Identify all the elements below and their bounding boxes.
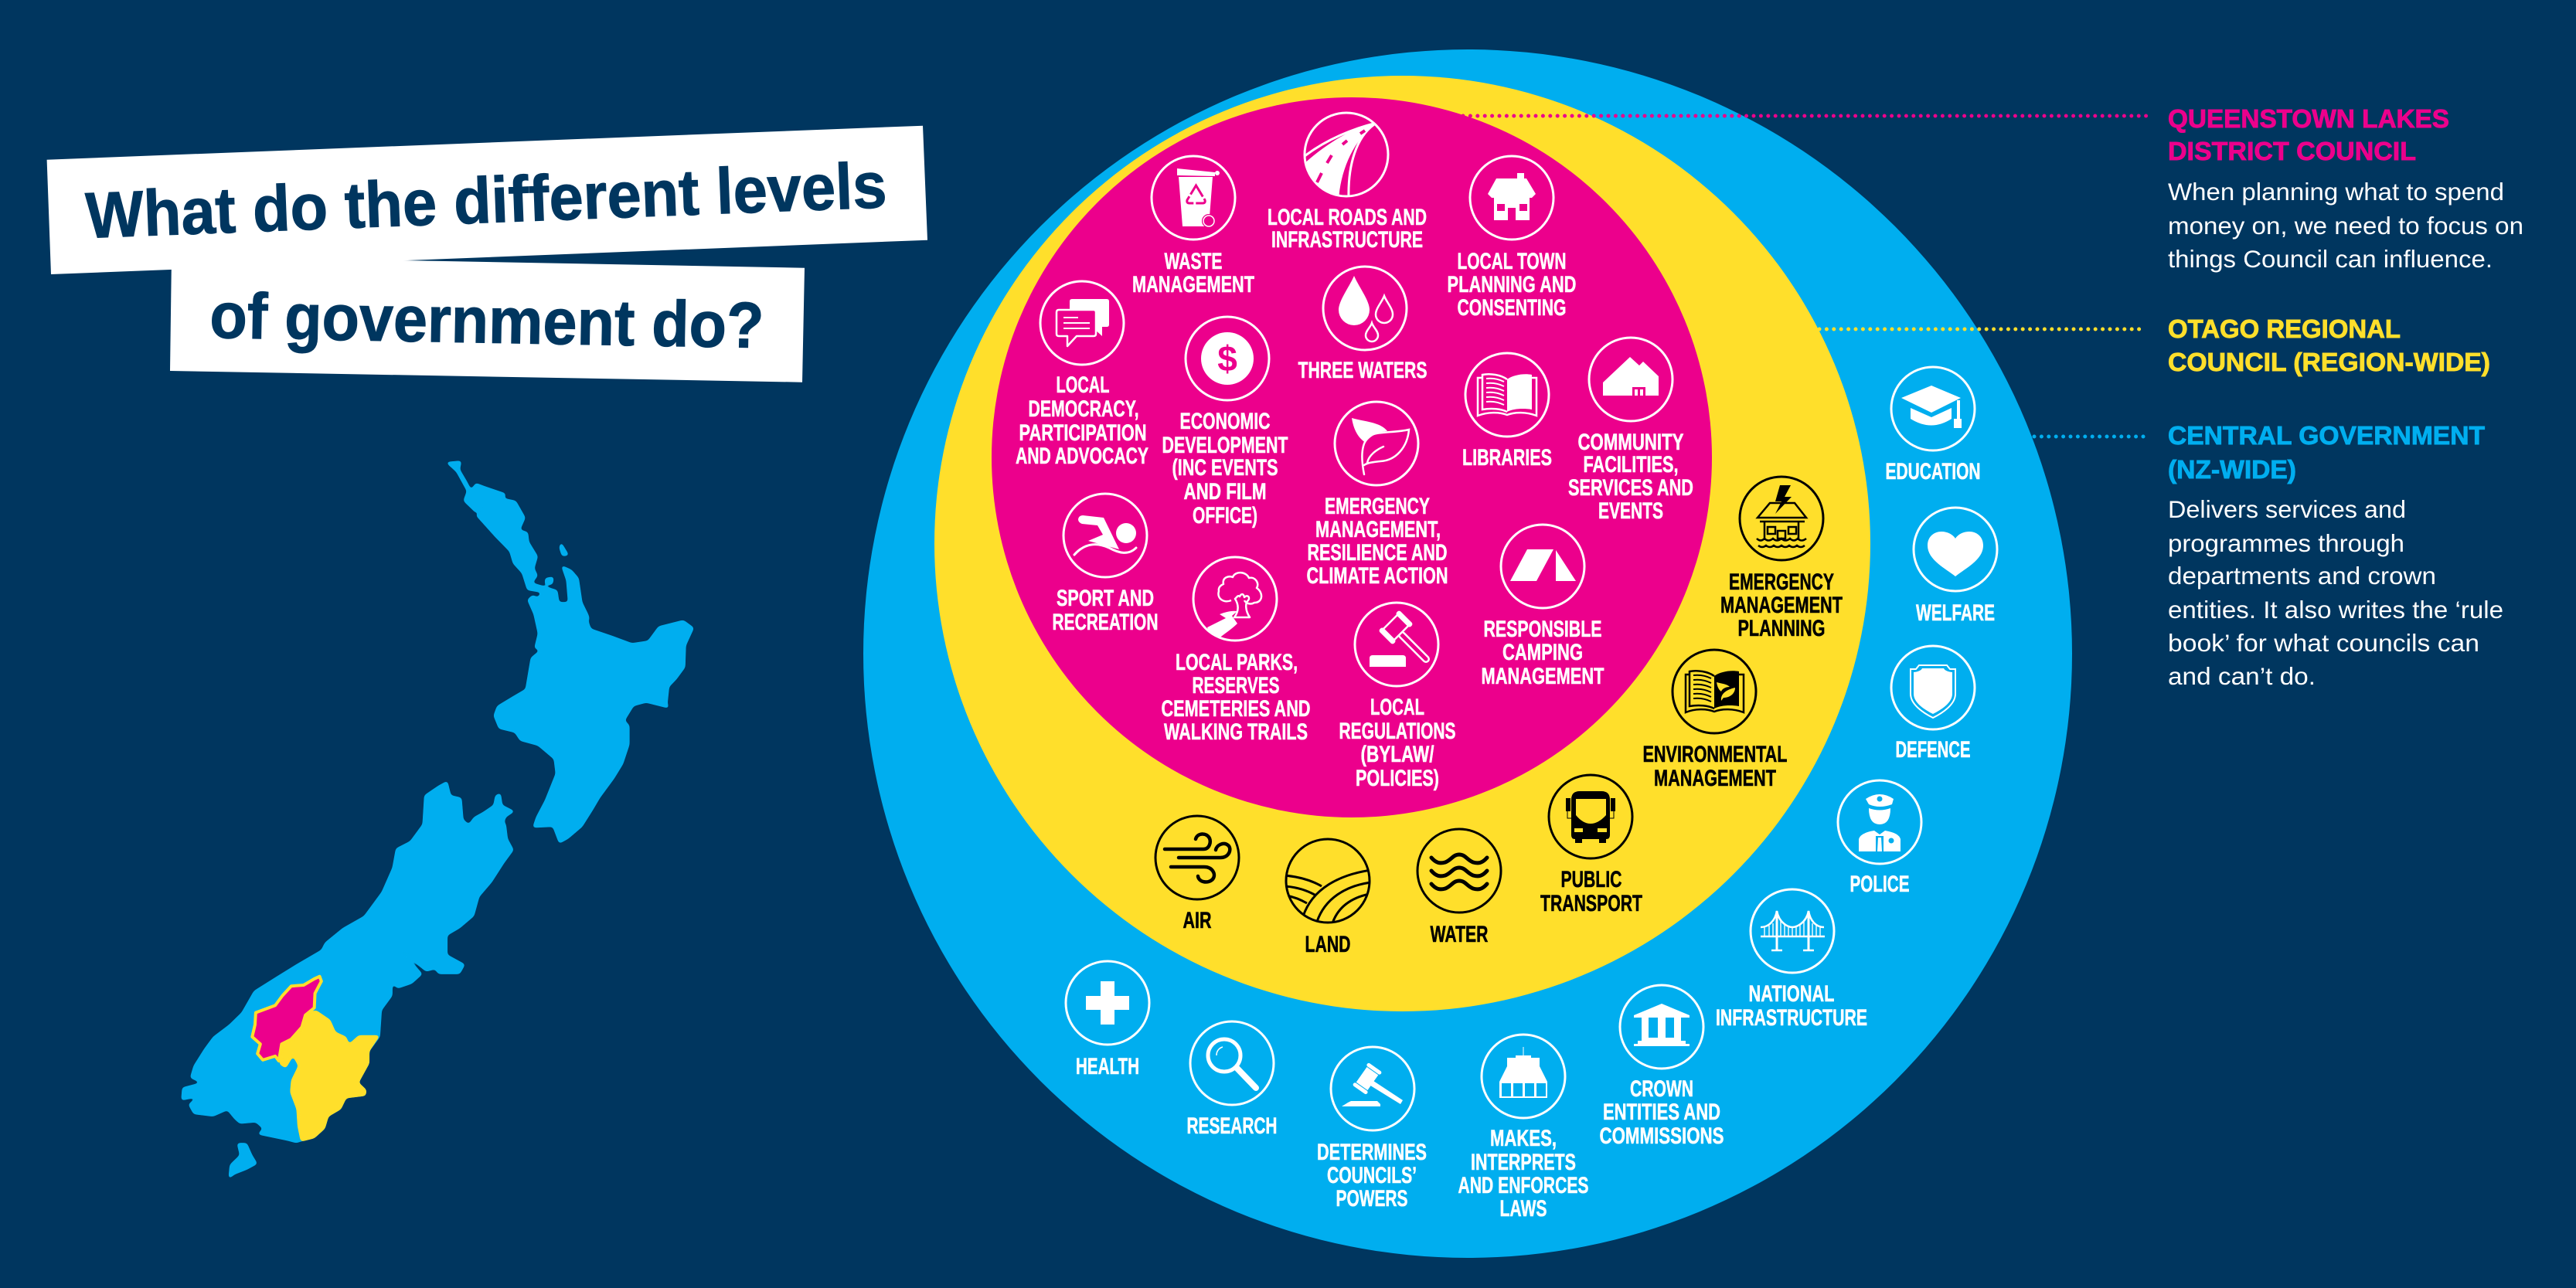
label: AND ADVOCACY — [1016, 443, 1148, 469]
body text — [2168, 495, 2503, 690]
service: air — [1155, 816, 1239, 933]
body text: entities. It also writes the ‘rule — [2168, 596, 2503, 624]
icon: magnifying glass — [1190, 1021, 1274, 1105]
leader line: central government — [2034, 434, 2146, 439]
heading — [2168, 421, 2485, 484]
label: POWERS — [1336, 1186, 1408, 1212]
Queenstown Lakes district — [252, 977, 322, 1061]
label: DEMOCRACY, — [1028, 396, 1139, 422]
service: crown entities and commissions — [1600, 985, 1724, 1149]
title: banner — [47, 126, 927, 382]
icon: graduation cap — [1891, 367, 1975, 450]
label: POLICIES) — [1356, 766, 1439, 791]
body text: money on, we need to focus on — [2168, 212, 2523, 240]
heading: (NZ-WIDE) — [2168, 455, 2296, 484]
service: economic development — [1162, 317, 1288, 528]
label: RESPONSIBLE — [1484, 617, 1601, 642]
label — [1268, 205, 1427, 253]
label — [1016, 372, 1148, 469]
leader line: regional council — [1819, 328, 2146, 331]
icon: wind — [1155, 816, 1239, 899]
service: community facilities — [1568, 338, 1693, 524]
body text: Delivers services and — [2168, 495, 2406, 523]
label: LOCAL ROADS AND — [1268, 205, 1427, 230]
label: DEVELOPMENT — [1162, 433, 1288, 458]
title line 1 strip — [47, 126, 927, 274]
label: SERVICES AND — [1568, 475, 1693, 501]
label: DETERMINES — [1317, 1140, 1427, 1165]
service: police — [1838, 780, 1921, 897]
label — [1447, 249, 1577, 321]
Stewart Island — [229, 1143, 257, 1179]
Otago region — [280, 1011, 380, 1142]
service: education — [1886, 367, 1980, 484]
label: CAMPING — [1502, 640, 1583, 665]
service: local town planning and consenting — [1447, 156, 1577, 321]
icon: water drops — [1323, 267, 1407, 350]
service: local regulations — [1339, 603, 1456, 791]
text block: Queenstown Lakes District Council — [2168, 104, 2523, 273]
service: emergency management planning — [1720, 477, 1843, 641]
icon: swimmer — [1063, 494, 1147, 577]
label: INTERPRETS — [1471, 1150, 1576, 1175]
icon: flooded house with lightning — [1740, 477, 1823, 560]
label: WELFARE — [1916, 600, 1995, 626]
label: (BYLAW/ — [1360, 742, 1434, 767]
label — [1161, 650, 1311, 745]
label: (INC EVENTS — [1172, 455, 1278, 481]
title line 2 strip: of government do? — [209, 279, 764, 362]
icon: shield — [1891, 646, 1975, 729]
label: MANAGEMENT — [1481, 664, 1604, 689]
service: libraries — [1462, 353, 1552, 471]
icon: dollar coin: $ — [1217, 338, 1237, 379]
body text: departments and crown — [2168, 562, 2436, 590]
label — [1162, 409, 1288, 528]
label: LOCAL — [1056, 372, 1110, 398]
label: AND ENFORCES — [1458, 1173, 1589, 1198]
icon: open book — [1465, 353, 1549, 437]
text block: Central Government — [2168, 421, 2503, 690]
label: PARTICIPATION — [1019, 420, 1147, 446]
body text: When planning what to spend — [2168, 178, 2504, 206]
body text: and can’t do. — [2168, 662, 2316, 690]
icon: tree and path — [1193, 557, 1277, 641]
label: PLANNING — [1737, 616, 1826, 641]
label: INFRASTRUCTURE — [1271, 227, 1423, 253]
label: SPORT AND — [1057, 586, 1154, 611]
label: MAKES, — [1490, 1126, 1557, 1151]
label: LOCAL — [1370, 695, 1424, 720]
service: makes, interprets and enforces laws — [1458, 1035, 1589, 1222]
label — [1132, 249, 1254, 297]
body text: book’ for what councils can — [2168, 629, 2479, 657]
label: COMMISSIONS — [1600, 1123, 1724, 1149]
service: environmental management — [1643, 650, 1787, 791]
label: PLANNING AND — [1447, 272, 1577, 297]
label — [1568, 430, 1693, 524]
label — [1458, 1126, 1589, 1222]
title line 1 strip: What do the different levels — [84, 148, 888, 252]
label: POLICE — [1850, 872, 1909, 897]
service: local roads and infrastructure — [1268, 113, 1427, 253]
label: CLIMATE ACTION — [1306, 563, 1448, 589]
service: local democracy — [1016, 281, 1148, 469]
label: LOCAL TOWN — [1458, 249, 1566, 274]
icon: police officer — [1838, 780, 1921, 864]
icon: gavel — [1355, 603, 1438, 686]
label: THREE WATERS — [1298, 358, 1427, 383]
label — [1306, 494, 1448, 589]
service: water — [1417, 829, 1501, 947]
label: LIBRARIES — [1462, 445, 1552, 471]
circle: central government — [863, 49, 2072, 1258]
service: health — [1066, 961, 1149, 1079]
service: responsible camping management — [1481, 525, 1604, 689]
heading: CENTRAL GOVERNMENT — [2168, 421, 2485, 450]
label: ECONOMIC — [1179, 409, 1271, 434]
service: research — [1187, 1021, 1277, 1139]
label: ENVIRONMENTAL — [1643, 742, 1787, 767]
text block: Otago Regional Council — [2168, 314, 2490, 376]
icon: parliament beehive — [1482, 1035, 1565, 1118]
label: RESERVES — [1192, 673, 1280, 698]
icon: gavel — [1331, 1047, 1414, 1130]
label: WASTE — [1164, 249, 1223, 274]
service: local parks, reserves, cemeteries and walking trails — [1161, 557, 1311, 745]
circle: district council — [992, 97, 1712, 817]
service: public transport — [1540, 775, 1642, 916]
label: WATER — [1430, 922, 1489, 947]
label — [1720, 569, 1843, 641]
icon: fields — [1285, 839, 1371, 926]
label — [1716, 981, 1867, 1031]
icon: waves — [1417, 829, 1501, 912]
service: emergency management, resilience and climate action — [1306, 402, 1448, 589]
label: AND FILM — [1184, 479, 1266, 505]
service: defence — [1891, 646, 1975, 763]
icon: suspension bridge — [1751, 889, 1834, 973]
service: three waters — [1298, 267, 1427, 383]
icon: bus — [1549, 775, 1632, 858]
label: RESEARCH — [1187, 1113, 1277, 1139]
icon: classical building — [1620, 985, 1703, 1069]
label: DEFENCE — [1895, 737, 1971, 763]
label: TRANSPORT — [1540, 891, 1642, 916]
label: EMERGENCY — [1325, 494, 1430, 519]
label: MANAGEMENT — [1720, 593, 1843, 618]
service: determines councils' powers — [1317, 1047, 1427, 1212]
label: LAND — [1305, 932, 1351, 957]
label — [1643, 742, 1787, 791]
service: waste management — [1132, 156, 1254, 297]
map of New Zealand — [181, 460, 694, 1179]
body text — [2168, 178, 2523, 273]
circle: regional council — [934, 76, 1870, 1011]
label: ENTITIES AND — [1603, 1099, 1720, 1125]
label — [1317, 1140, 1427, 1212]
heading: QUEENSTOWN LAKES — [2168, 104, 2449, 133]
icon: tent — [1501, 525, 1584, 608]
icon: medical cross — [1066, 961, 1149, 1045]
label: COUNCILS’ — [1327, 1163, 1417, 1188]
label: EDUCATION — [1886, 459, 1980, 484]
icon: road — [1303, 113, 1388, 201]
label: WALKING TRAILS — [1164, 719, 1308, 745]
label: RECREATION — [1053, 610, 1158, 635]
label: MANAGEMENT — [1654, 766, 1776, 791]
label — [1481, 617, 1604, 689]
heading: DISTRICT COUNCIL — [2168, 137, 2416, 165]
icon: heart — [1914, 508, 1997, 591]
body text: programmes through — [2168, 529, 2404, 557]
service: sport and recreation — [1053, 494, 1158, 635]
label: AIR — [1183, 908, 1212, 933]
label: CONSENTING — [1458, 295, 1566, 321]
label — [1053, 586, 1158, 635]
label — [1339, 695, 1456, 791]
icon: house — [1470, 156, 1553, 240]
label: OFFICE) — [1193, 503, 1257, 528]
service: national infrastructure — [1716, 889, 1867, 1031]
label: FACILITIES, — [1583, 452, 1679, 477]
icon: speech bubbles — [1040, 281, 1124, 365]
body text: things Council can influence. — [2168, 245, 2493, 273]
label: EMERGENCY — [1729, 569, 1834, 595]
label: LOCAL PARKS, — [1176, 650, 1298, 675]
label: COMMUNITY — [1578, 430, 1684, 455]
service: welfare — [1914, 508, 1997, 626]
label: HEALTH — [1076, 1054, 1139, 1079]
icon: dollar coin — [1186, 317, 1269, 400]
label — [1540, 867, 1642, 916]
label: CROWN — [1630, 1076, 1693, 1102]
label: NATIONAL — [1748, 981, 1835, 1007]
label: CEMETERIES AND — [1161, 696, 1311, 722]
icon: wheelie bin — [1152, 156, 1235, 240]
South Island — [181, 781, 515, 1143]
label: MANAGEMENT — [1132, 272, 1254, 297]
label: EVENTS — [1598, 498, 1663, 524]
label: REGULATIONS — [1339, 719, 1456, 744]
service: land — [1285, 839, 1371, 957]
leader line: district council — [1463, 114, 2146, 117]
icon: leaves — [1335, 402, 1418, 485]
text block: Otago Regional Council: COUNCIL (REGION-WIDE) — [2168, 348, 2490, 376]
North Island — [446, 460, 694, 844]
heading — [2168, 104, 2449, 165]
label — [1600, 1076, 1724, 1149]
icon: book with leaf — [1673, 650, 1756, 733]
label: PUBLIC — [1561, 867, 1621, 892]
label: RESILIENCE AND — [1308, 540, 1447, 566]
text block: Otago Regional Council: OTAGO REGIONAL — [2168, 314, 2401, 343]
title line 2 strip — [170, 257, 805, 382]
icon: community hall — [1589, 338, 1673, 421]
label: LAWS — [1499, 1196, 1547, 1222]
label: MANAGEMENT, — [1315, 517, 1441, 542]
label: INFRASTRUCTURE — [1716, 1005, 1867, 1031]
